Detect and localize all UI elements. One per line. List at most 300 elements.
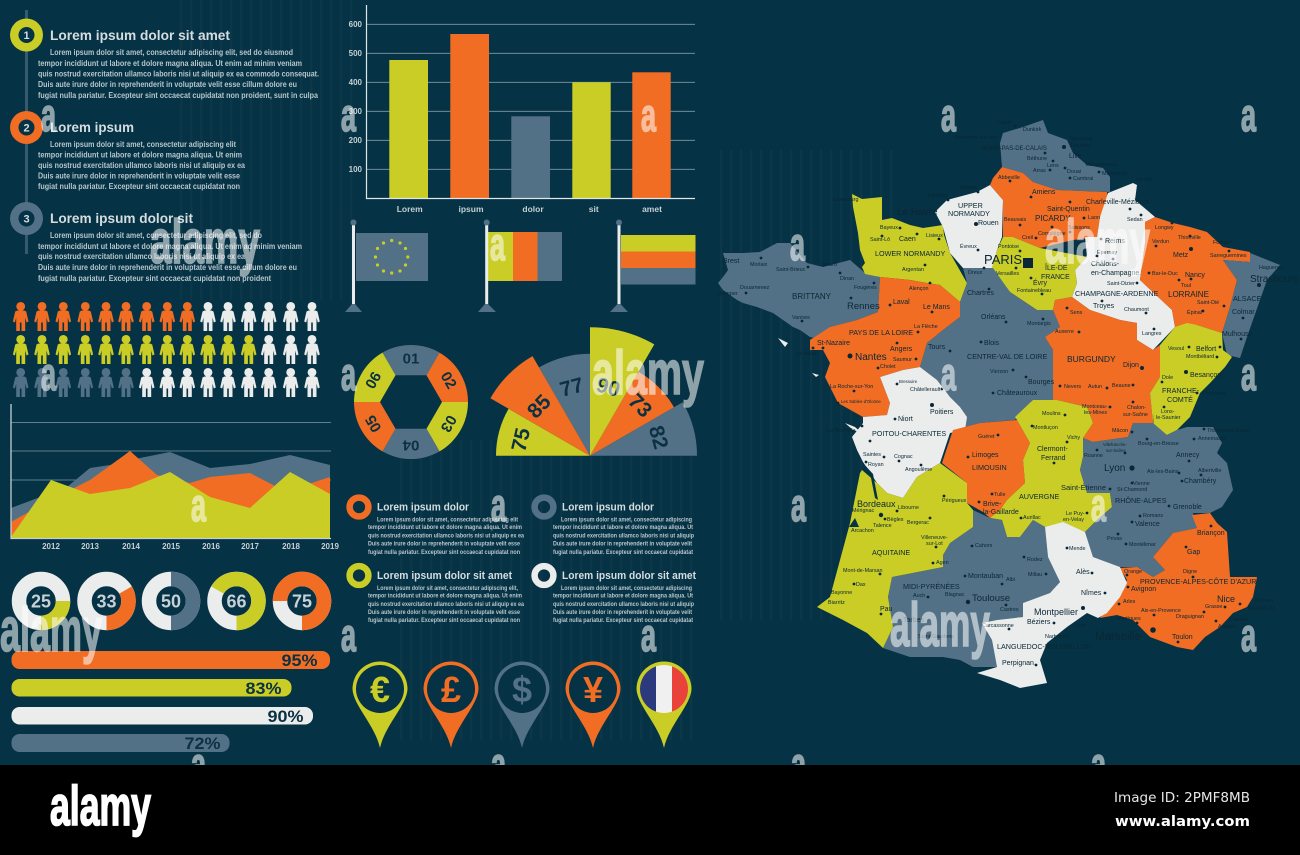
map labels and cities: Besançon xyxy=(1190,372,1221,379)
map labels and cities: Saint-Gaudens xyxy=(918,634,954,640)
alamy watermarks: a xyxy=(1091,479,1106,531)
alamy watermarks: a xyxy=(491,738,506,790)
map labels and cities: Bayonne xyxy=(831,590,852,596)
legend block: lime: Duis aute irure dolor in reprehenderit in voluptate velit esse xyxy=(368,609,520,616)
map labels and cities: Montauban xyxy=(968,573,1003,580)
map labels and cities: Saint-Dié xyxy=(1197,300,1219,306)
map labels and cities: PROVENCE-ALPES-CÔTE D'AZUR xyxy=(1140,577,1256,586)
map labels and cities: Les Sables-d'Olonne xyxy=(841,399,881,404)
map labels and cities: Montargis xyxy=(1027,321,1051,327)
alamy watermarks: a xyxy=(1241,609,1256,661)
bar 90%: 90% xyxy=(268,707,304,726)
map labels and cities: LOWER NORMANDY xyxy=(875,249,945,258)
wedge 75: 75 xyxy=(507,426,535,454)
donut 33 xyxy=(84,579,128,623)
legend block: orange xyxy=(350,498,524,556)
map labels and cities: Biarritz xyxy=(828,600,845,606)
map labels and cities: Rodez xyxy=(1027,557,1043,563)
map labels and cities: Mâcon xyxy=(1112,428,1128,434)
segment 04: 04 xyxy=(402,436,419,454)
map labels and cities: Auxerre xyxy=(1055,329,1074,335)
map labels and cities: Sedan xyxy=(1127,217,1143,223)
map labels and cities: Épinal xyxy=(1187,309,1202,316)
flag: horizontal tricolour xyxy=(610,220,696,312)
map labels and cities: Montpellier xyxy=(1034,607,1078,617)
map labels and cities: Pau xyxy=(880,606,893,613)
alamy watermarks: a xyxy=(191,738,206,790)
wedge 77 xyxy=(539,354,590,456)
pin: euro: € xyxy=(370,669,390,710)
section 2 text block: fugiat nulla pariatur. Excepteur sint occaecat cupidatat non xyxy=(38,182,240,191)
legend block: lime: Lorem ipsum dolor sit amet, consectetur adipiscing elit, xyxy=(377,585,518,592)
map labels and cities: sur-Saône xyxy=(1123,412,1148,418)
legend block: slate: quis nostrud exercitation ullamco laboris nisi ut aliquip xyxy=(553,532,694,540)
region: Alsace xyxy=(1222,253,1280,358)
map labels and cities: Béziers xyxy=(1027,619,1051,626)
map labels and cities: Cahors xyxy=(975,543,993,549)
map labels and cities: Toul xyxy=(1181,283,1191,289)
map labels and cities: Chartres xyxy=(967,290,994,297)
map labels and cities: Dreux xyxy=(968,270,983,276)
alamy watermarks: alamy xyxy=(890,591,990,660)
region: Midi-Pyrénées xyxy=(883,510,1060,667)
alamy watermarks: a xyxy=(341,609,356,661)
Arcachon basin xyxy=(849,518,859,527)
legend block: slate: fugiat nulla pariatur. Excepteur sint occaecat cupidatat xyxy=(553,549,693,556)
bar chart xyxy=(349,5,695,214)
map labels and cities: Le Mans xyxy=(923,304,950,311)
map labels and cities: Limoges xyxy=(972,452,999,459)
map labels and cities: Villefranche- xyxy=(1103,442,1127,447)
map labels and cities: Antibes xyxy=(1218,624,1236,630)
map labels and cities: Mérignac xyxy=(852,508,874,514)
map labels and cities: Épernay xyxy=(1097,249,1117,256)
map labels and cities: Toulon xyxy=(1172,634,1193,641)
region: Champagne-Ardenne xyxy=(1072,183,1175,350)
alamy watermarks: a xyxy=(41,89,56,141)
map labels and cities: Fontainebleau xyxy=(1017,288,1051,294)
map labels and cities: Digne xyxy=(1183,569,1197,575)
map labels and cities: Nevers xyxy=(1064,384,1081,390)
map labels and cities: Reims xyxy=(1105,238,1125,245)
map labels and cities: PAYS DE LA LOIRE xyxy=(849,328,913,337)
map labels and cities: PARIS xyxy=(984,252,1022,267)
map labels and cities: Laval xyxy=(893,299,910,306)
legend block: slate: tempor incididunt ut labore et dolore magna aliqua. Ut xyxy=(553,524,693,531)
map labels and cities: Menton xyxy=(1255,598,1273,604)
map labels and cities: Alès xyxy=(1076,569,1090,576)
alamy watermarks: a xyxy=(1241,348,1256,400)
map labels and cities: Bar-le-Duc xyxy=(1152,271,1178,277)
map labels and cities: LANGUEDOC-ROUSSILLON xyxy=(997,642,1091,651)
area chart: 2014 xyxy=(122,542,140,551)
region: Brittany xyxy=(718,243,880,340)
map labels and cities: Avignon xyxy=(1131,586,1156,593)
alamy watermarks: a xyxy=(1091,738,1106,790)
section 1 text block: Duis aute irure dolor in reprehenderit in voluptate velit esse cillum dolore eu xyxy=(38,80,297,89)
map labels and cities: Quimper xyxy=(717,291,738,297)
map labels and cities: Saumur xyxy=(893,357,912,363)
map labels and cities: Douai xyxy=(1067,169,1081,175)
map labels and cities: Cognac xyxy=(894,454,913,460)
map labels and cities: ÎLE-DE xyxy=(1044,263,1068,272)
area chart: 2012 xyxy=(42,542,60,551)
section 2 text block: Duis aute irure dolor in reprehenderit in voluptate velit esse xyxy=(38,172,240,180)
legend block: white: quis nostrud exercitation ullamco laboris nisi ut aliquip xyxy=(553,601,694,608)
bar 72%: 72% xyxy=(184,734,220,753)
wedge 85 xyxy=(490,356,590,456)
legend block: lime: fugiat nulla pariatur. Excepteur sint occaecat cupidatat non xyxy=(368,617,520,624)
map labels and cities: Saint-Étienne xyxy=(1061,483,1106,492)
map labels and cities: Autun xyxy=(1088,384,1102,390)
alamy watermarks: a xyxy=(941,348,956,400)
map labels and cities: Cherbourg xyxy=(833,197,858,203)
map labels and cities: Castres xyxy=(1000,607,1019,613)
bar 95%: 95% xyxy=(282,651,318,670)
map labels and cities: Montceau- xyxy=(1082,404,1108,410)
map labels and cities: AUVERGNE xyxy=(1019,492,1060,501)
map labels and cities: Nantes xyxy=(855,352,887,363)
section 3 text block: Lorem ipsum dolor sit xyxy=(50,211,194,226)
map labels and cities: Vesoul xyxy=(1168,346,1184,352)
map labels and cities: Nîmes xyxy=(1081,590,1102,597)
map labels and cities: Villeneuve- xyxy=(921,535,948,541)
map labels and cities: Haguenau xyxy=(1259,265,1284,271)
map labels and cities: La Roche-sur-Yon xyxy=(830,384,873,390)
map labels and cities: Bressuire xyxy=(899,379,918,384)
map labels and cities: Aix-en-Provence xyxy=(1141,608,1181,614)
area chart: 2015 xyxy=(162,542,180,551)
map labels and cities: Alençon xyxy=(909,286,928,292)
section 1 text block: fugiat nulla pariatur. Excepteur sint occaecat cupidatat non proident, sunt in culpa xyxy=(38,91,318,100)
map labels and cities: Cholet xyxy=(880,364,896,370)
map labels and cities: le-Saunier xyxy=(1156,415,1181,421)
wedge 90: 90 xyxy=(594,373,623,402)
segment 03: 03 xyxy=(437,412,460,435)
map labels and cities: Amiens xyxy=(1032,189,1056,196)
segment 05: 05 xyxy=(362,412,385,435)
region: Lower Normandy xyxy=(852,194,967,302)
map labels and cities: Romans xyxy=(1143,513,1163,519)
section 2 text block xyxy=(10,111,245,191)
legend block: white xyxy=(535,566,696,624)
map labels and cities: Longwy xyxy=(1155,225,1174,231)
section 1 text block: 1 xyxy=(23,30,30,42)
map labels and cities: Dunkirk xyxy=(1023,127,1042,133)
map labels and cities: Valence xyxy=(1135,521,1160,528)
bar 83%: 83% xyxy=(246,679,282,698)
map labels and cities: Roubaix xyxy=(1071,143,1091,149)
legend block: slate xyxy=(535,498,694,556)
map labels and cities: Boulogne-sur-Mer xyxy=(955,135,998,141)
alamy watermarks xyxy=(0,89,1256,790)
map labels and cities: Évry xyxy=(1033,278,1048,287)
pin: yen: ¥ xyxy=(583,669,603,710)
map labels and cities: Le Puy- xyxy=(1066,511,1085,517)
map labels and cities: Caen xyxy=(899,236,916,243)
map labels and cities: Évreux xyxy=(960,243,977,250)
map labels and cities: MONACO xyxy=(1248,606,1275,612)
map labels and cities: Compiègne xyxy=(1038,231,1066,237)
map labels and cities: Montbéliard xyxy=(1186,354,1214,360)
region: Picardy xyxy=(990,167,1108,248)
pin: yen xyxy=(566,661,620,748)
map labels and cities: Cambrai xyxy=(1073,176,1093,182)
map labels and cities: Valenciennes xyxy=(1085,162,1117,168)
pin: euro xyxy=(352,661,408,748)
bar chart: ipsum xyxy=(458,204,484,214)
map labels and cities: Metz xyxy=(1173,252,1189,259)
map labels and cities: St-Chamond xyxy=(1117,487,1147,493)
bar chart: 300 xyxy=(349,107,363,116)
donut 50: 50 xyxy=(161,592,181,612)
map labels and cities: Aurillac xyxy=(1023,515,1041,521)
map labels and cities: FRANCE xyxy=(1041,274,1070,281)
area chart: 2016 xyxy=(202,542,220,551)
bar chart: sit xyxy=(589,204,599,214)
map labels and cities: AQUITAINE xyxy=(872,548,910,557)
area chart: 2018 xyxy=(282,542,300,551)
map labels and cities: en-Velay xyxy=(1063,517,1084,523)
map labels and cities: Saintes xyxy=(863,452,881,458)
map labels and cities: Strasbourg xyxy=(1250,274,1299,285)
alamy watermarks: a xyxy=(791,479,806,531)
map labels and cities: CENTRE-VAL DE LOIRE xyxy=(967,352,1047,361)
map labels and cities: Montélimar xyxy=(1129,542,1156,548)
map labels and cities: Rouen xyxy=(978,220,999,227)
map labels and cities: Argentan xyxy=(902,267,924,273)
France map xyxy=(717,120,1299,688)
map labels and cities: Blagnac xyxy=(945,592,965,598)
map labels and cities: Briançon xyxy=(1197,530,1225,537)
bar chart: 200 xyxy=(349,136,363,145)
alamy watermarks: a xyxy=(641,89,656,141)
map labels and cities: Brest xyxy=(723,258,739,265)
section 3 text block xyxy=(10,202,302,283)
map labels and cities: Carcassonne xyxy=(982,623,1014,629)
map labels and cities: Dax xyxy=(856,582,866,588)
map labels and cities: Orléans xyxy=(981,314,1006,321)
region: Aquitaine xyxy=(817,463,973,648)
map labels and cities: Niort xyxy=(898,416,913,423)
map labels and cities: Poitiers xyxy=(930,409,954,416)
region: Pays de la Loire xyxy=(810,277,960,417)
wedge 73 xyxy=(590,372,674,456)
bar 72% xyxy=(12,734,230,753)
map labels and cities: Roanne xyxy=(1084,453,1103,459)
section 2 text block: tempor incididunt ut labore et dolore magna aliqua. Ut enim xyxy=(38,150,242,160)
map labels and cities: Nice xyxy=(1217,594,1235,604)
area chart: 2019 xyxy=(321,542,339,551)
map labels and cities: Bourges xyxy=(1028,379,1055,386)
map labels and cities: Colmar xyxy=(1232,309,1255,316)
map labels and cities: Saint-Quentin xyxy=(1047,206,1090,213)
wedge 85: 85 xyxy=(523,390,556,423)
map labels and cities: Talence xyxy=(873,523,892,529)
legend block: orange: Lorem ipsum dolor xyxy=(377,502,470,514)
map labels and cities: Perpignan xyxy=(1002,660,1034,667)
Gironde estuary xyxy=(862,462,878,500)
people pictogram xyxy=(13,302,320,397)
map labels and cities: Lyon xyxy=(1104,463,1125,474)
map labels and cities: Bordeaux xyxy=(857,499,896,509)
region: Centre-Val de Loire xyxy=(920,268,1060,430)
map labels and cities: Thonon-les-Bains xyxy=(1207,428,1250,434)
website: www.alamy.com xyxy=(1115,814,1250,830)
map labels and cities: Beauvais xyxy=(1004,217,1026,223)
bar 95% xyxy=(12,651,330,670)
alamy watermarks: alamy xyxy=(0,596,102,665)
map labels and cities: Annemasse xyxy=(1198,436,1226,442)
progress bars xyxy=(12,651,330,753)
map labels and cities: Dole xyxy=(1162,375,1173,381)
pin: France flag xyxy=(636,661,692,748)
map labels and cities: NORMANDY xyxy=(948,209,990,218)
region: Burgundy xyxy=(1045,297,1160,442)
map labels and cities: BRITTANY xyxy=(792,292,832,301)
area chart: 2017 xyxy=(241,542,259,551)
Atlantic islands xyxy=(778,338,862,450)
map labels and cities: sur-Lot xyxy=(926,541,943,547)
section 2 text block: 2 xyxy=(23,122,30,134)
map labels and cities: Mont-de-Marsan xyxy=(843,568,883,574)
map labels and cities: Périgueux xyxy=(942,498,967,504)
map labels and cities: en-Champagne xyxy=(1091,270,1139,277)
map labels and cities: Bourg-en-Bresse xyxy=(1138,441,1179,447)
map labels and cities: Verdun xyxy=(1152,239,1169,245)
region: Auvergne xyxy=(990,400,1112,537)
map labels and cities: Maubeuge xyxy=(1102,171,1127,177)
map labels and cities: sur-Saône xyxy=(1106,448,1126,453)
alamy watermarks: a xyxy=(941,89,956,141)
map labels and cities: CHAMPAGNE-ARDENNE xyxy=(1075,289,1159,298)
map labels and cities: PICARDY xyxy=(1035,214,1071,223)
donut 75 xyxy=(280,579,324,623)
section 2 text block: quis nostrud exercitation ullamco laboris nisi ut aliquip ex ea xyxy=(38,161,245,170)
map labels and cities: Royan xyxy=(868,462,884,468)
map labels and cities: Chaumont xyxy=(1124,307,1149,313)
alamy watermarks: a xyxy=(490,218,505,270)
alamy watermarks: a xyxy=(191,479,206,531)
map labels and cities: Gap xyxy=(1187,549,1200,556)
map labels and cities: Châtellerault xyxy=(910,387,941,393)
map labels and cities: Soissons xyxy=(1068,225,1090,231)
donut 66 xyxy=(214,579,259,623)
map labels and cities: Sarreguemines xyxy=(1210,253,1247,259)
donut 75: 75 xyxy=(292,592,312,612)
map labels and cities: Troyes xyxy=(1093,303,1115,310)
map labels and cities: Rennes xyxy=(847,301,880,312)
map labels and cities: Pontarlier xyxy=(1203,391,1226,397)
map labels and cities: Moulins xyxy=(1042,411,1061,417)
map labels and cities: LORRAINE xyxy=(1168,290,1209,299)
hexagonal ring chart xyxy=(354,345,468,459)
wedge 82 xyxy=(590,402,697,456)
bar chart: 400 xyxy=(349,78,363,87)
alamy watermarks: alamy xyxy=(592,339,704,408)
legend block: orange: quis nostrud exercitation ullamco laboris nisi ut aliquip ex ea xyxy=(368,532,524,540)
map labels and cities: Arles xyxy=(1123,599,1136,605)
map labels and cities: Cannes xyxy=(1230,617,1249,623)
flag: EU xyxy=(345,220,428,312)
section 3 text block: Duis aute irure dolor in reprehenderit in voluptate velit esse cillum dolore eu xyxy=(38,263,297,272)
map labels and cities: Tarbes xyxy=(903,617,925,624)
section 3 text block: fugiat nulla pariatur. Excepteur sint occaecat cupidatat non proident xyxy=(38,274,271,283)
map labels and cities: Saint-Lô xyxy=(870,237,890,243)
map labels and cities: Saint-Dizier xyxy=(1107,281,1135,287)
legend block: slate: Lorem ipsum dolor xyxy=(562,502,655,514)
map labels and cities: Dinan xyxy=(840,276,854,282)
pin: dollar xyxy=(494,661,550,748)
donut 50 xyxy=(149,579,193,623)
legend block: orange: Duis aute irure dolor in reprehenderit in voluptate velit esse xyxy=(368,540,520,548)
map labels and cities: Lons- xyxy=(1161,409,1175,415)
map labels and cities: Laon xyxy=(1088,215,1100,221)
map labels and cities: Brive- xyxy=(983,501,1002,508)
map labels and cities: Arcachon xyxy=(851,528,874,534)
region: Limousin xyxy=(942,420,1030,518)
map labels and cities: Martigues xyxy=(1117,616,1141,622)
map labels and cities: Albi xyxy=(1006,577,1015,583)
region: Nord-Pas-de-Calais xyxy=(1000,120,1110,192)
bar chart: Lorem xyxy=(397,204,423,214)
wedge 73: 73 xyxy=(623,389,656,422)
area chart xyxy=(11,404,339,551)
pin: pound xyxy=(424,661,478,748)
alamy watermarks: a xyxy=(341,89,356,141)
section 1 text block xyxy=(10,10,319,254)
legend block: orange: tempor incididunt ut labore et dolore magna aliqua. Ut enim xyxy=(368,524,522,531)
map labels and cities: Nancy xyxy=(1185,272,1205,279)
map labels and cities: BURGUNDY xyxy=(1067,354,1116,364)
map labels and cities: La Flèche xyxy=(914,324,938,330)
map labels and cities: Béthune xyxy=(1027,156,1047,162)
map labels and cities: Douarnenez xyxy=(740,285,770,291)
map labels and cities: Hirson xyxy=(1137,177,1153,183)
map labels and cities: Tulle xyxy=(994,492,1005,498)
donut 25: 25 xyxy=(31,592,51,612)
bar chart: 600 xyxy=(349,20,363,29)
bar chart: amet xyxy=(642,204,662,214)
map labels and cities: Millau xyxy=(1028,572,1042,578)
wedge 90 xyxy=(590,327,654,456)
section 1 text block: quis nostrud exercitation ullamco laboris nisi ut aliquip ex ea commodo consequat. xyxy=(38,70,319,78)
map labels and cities: Vienne xyxy=(1133,481,1150,487)
section 3 text block: tempor incididunt ut labore et dolore magna aliqua. Ut enim ad minim veniam xyxy=(38,242,302,251)
bar chart: 100 xyxy=(349,165,363,174)
flag: vertical tricolour xyxy=(478,220,562,312)
alamy watermarks: a xyxy=(1241,89,1256,141)
donut 33: 33 xyxy=(96,592,117,612)
legend block: lime xyxy=(350,566,524,624)
alamy watermarks: a xyxy=(641,609,656,661)
map labels and cities: Calais xyxy=(997,120,1012,126)
map labels and cities: LIMOUSIN xyxy=(972,463,1007,472)
map labels and cities: Sète xyxy=(1075,623,1086,629)
map labels and cities: Marseille xyxy=(1095,631,1141,643)
map labels and cities: Bayeux xyxy=(880,225,898,231)
map labels and cities: Clermont- xyxy=(1037,446,1068,453)
region: Provence-Alpes-Côte d'Azur xyxy=(1100,513,1257,650)
legend block: white: fugiat nulla pariatur. Excepteur sint occaecat cupidatat xyxy=(553,617,693,624)
map labels and cities: Vannes xyxy=(792,315,810,321)
map labels and cities: Vierzon xyxy=(990,369,1008,375)
map labels and cities: Sens xyxy=(1070,310,1083,316)
segment 06: 06 xyxy=(362,369,385,392)
map labels and cities: RHÔNE-ALPES xyxy=(1115,496,1167,505)
region: Rhône-Alpes xyxy=(1080,423,1233,577)
map labels and cities: la-Gaillarde xyxy=(983,509,1019,516)
